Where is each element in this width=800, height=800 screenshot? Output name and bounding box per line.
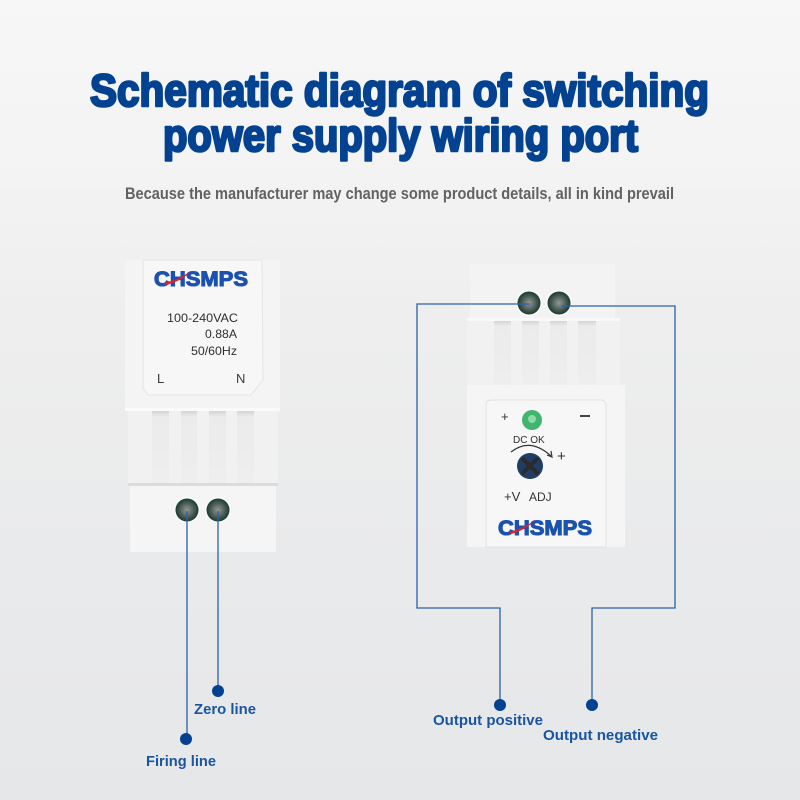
wires: input lines: [187, 511, 218, 739]
label plate: DC adjust: +: [501, 409, 509, 424]
marker dots: [180, 685, 598, 745]
label plate: input ratings: 0.88A: [205, 327, 237, 341]
label plate: input ratings: [143, 260, 263, 395]
title: Schematic diagram of switching: [90, 65, 709, 116]
arrow: adjust direction: [511, 445, 552, 457]
wires: output lines: [417, 304, 675, 705]
label plate: DC adjust: DC OK: [513, 435, 545, 446]
title: power supply wiring port: [163, 110, 638, 161]
label plate: DC adjust: +: [557, 448, 566, 465]
label plate: input ratings: L: [157, 371, 164, 386]
adjustment screw: [517, 453, 543, 479]
labels: Zero line: [194, 701, 256, 718]
labels: [146, 701, 658, 770]
labels: Output negative: [543, 727, 658, 744]
terminal screws: [174, 497, 231, 523]
label plate: input ratings: 100-240VAC: [167, 311, 238, 325]
LED: green indicator: [522, 410, 542, 430]
labels: Firing line: [146, 753, 216, 770]
label plate: DC adjust: ADJ: [529, 490, 552, 504]
label plate: DC adjust: [486, 400, 606, 547]
labels: Output positive: [433, 712, 543, 729]
label plate: input ratings: 50/60Hz: [191, 344, 237, 358]
title: [90, 65, 709, 161]
label plate: DC adjust: +V: [504, 489, 521, 504]
subtitle: Because the manufacturer may change some product details, all in kind prevail: [125, 184, 674, 203]
right device: output side: [467, 264, 625, 547]
terminal screws: [516, 290, 572, 316]
label plate: input ratings: N: [236, 371, 245, 386]
left device: input side: [125, 260, 280, 552]
logo: CHSMPS: CHSMPS: [154, 268, 248, 291]
logo: CHSMPS: CHSMPS: [498, 517, 592, 540]
